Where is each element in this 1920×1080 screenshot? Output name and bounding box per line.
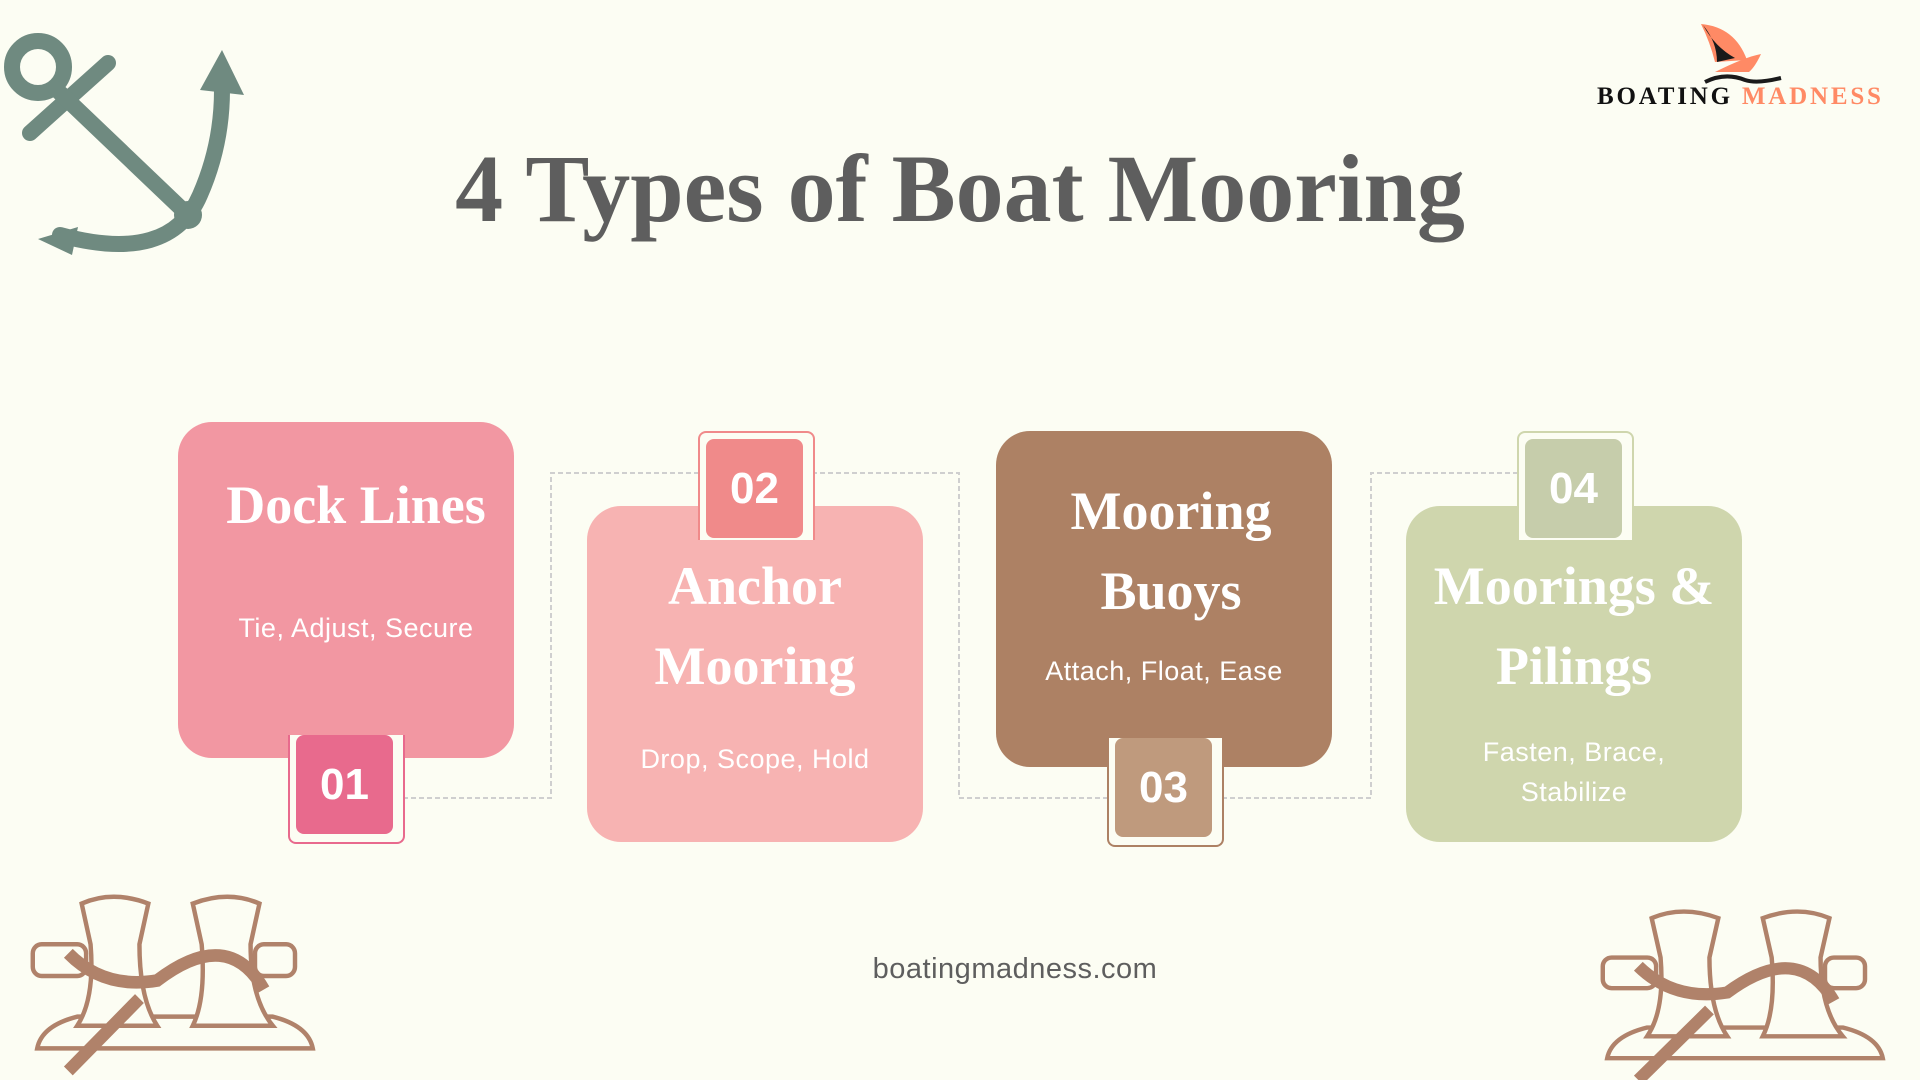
heading: Mooring: [654, 636, 855, 696]
text: Drop, Scope, Hold: [640, 744, 870, 774]
heading: Dock Lines: [226, 475, 486, 535]
icon: bollard left: [30, 894, 316, 1076]
title: 4 Types of Boat Mooring: [455, 135, 1465, 242]
heading: Mooring: [1070, 481, 1271, 541]
logo: [1597, 24, 1884, 110]
badge 03: [1107, 738, 1224, 847]
heading: [654, 556, 855, 696]
text: Tie, Adjust, Secure: [238, 613, 474, 643]
heading: Pilings: [1496, 636, 1652, 696]
badge 01: 01: [320, 760, 369, 809]
text: [1483, 737, 1665, 807]
badge 03: 03: [1139, 763, 1188, 812]
badge 02: 02: [730, 464, 779, 513]
badge 02: [698, 431, 815, 540]
text: Fasten, Brace,: [1483, 737, 1665, 767]
icon: bollard right: [1600, 909, 1886, 1080]
heading: [1070, 481, 1271, 621]
badge 04: [1517, 431, 1634, 540]
heading: [1434, 556, 1714, 696]
text: Attach, Float, Ease: [1045, 656, 1283, 686]
brand name: BOATING MADNESS: [1597, 83, 1884, 110]
footer url: boatingmadness.com: [873, 953, 1157, 985]
badge 01: [288, 735, 405, 844]
panel: anchor mooring: [587, 506, 923, 842]
badge 04: 04: [1549, 464, 1598, 513]
heading: Buoys: [1100, 561, 1242, 621]
panel: moorings & pilings: [1406, 506, 1742, 842]
heading: Anchor: [668, 556, 842, 616]
panel: mooring buoys: [996, 431, 1332, 767]
icon: sails: [1701, 24, 1782, 84]
icon: anchor: [4, 33, 244, 255]
text: Stabilize: [1521, 777, 1627, 807]
heading: Moorings &: [1434, 556, 1714, 616]
panel: dock lines: [178, 422, 514, 758]
